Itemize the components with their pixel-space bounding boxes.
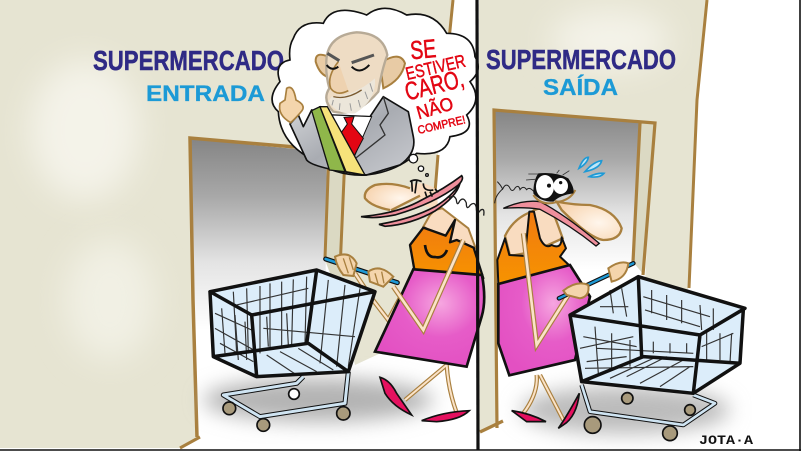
pink skirt [375, 269, 484, 367]
shopping cart: right [570, 277, 745, 441]
panel: right wall [479, 0, 707, 433]
cart basket [210, 270, 375, 377]
speech: do not buy if expensive [402, 33, 467, 137]
floor shadow: left [203, 378, 433, 422]
cart handle [559, 263, 633, 298]
wide eyes [526, 170, 575, 203]
speech: do not buy if expensive: SE [409, 33, 437, 65]
character: woman entering [326, 208, 484, 422]
nose [365, 184, 420, 210]
eyebrows [327, 53, 374, 63]
orange top [497, 212, 570, 284]
panel: right doorway [480, 110, 730, 434]
head: woman entering [361, 176, 484, 226]
jacket [290, 97, 414, 175]
face [326, 32, 387, 113]
character: woman leaving [495, 157, 633, 428]
pink skirt [498, 265, 590, 375]
eye lashes [410, 180, 438, 197]
nose [330, 62, 348, 93]
hands [563, 262, 628, 298]
thought dots [409, 154, 428, 176]
wheels [223, 389, 350, 431]
mouth [333, 90, 362, 97]
cart frame [223, 372, 348, 417]
speech: do not buy if expensive: ESTIVER [404, 51, 467, 84]
orange top [410, 220, 483, 278]
shirt [332, 115, 372, 155]
centre divider [477, 0, 478, 450]
curly hair [495, 182, 534, 203]
beard [328, 78, 375, 114]
speech: do not buy if expensive: NÃO [414, 93, 456, 123]
nose [557, 202, 622, 240]
face [410, 183, 438, 210]
closed eyes [327, 65, 369, 70]
cart basket [570, 277, 745, 393]
thought bubble [272, 8, 478, 176]
mouth [503, 201, 599, 246]
legs and shoes [380, 365, 469, 422]
front arm [393, 240, 463, 330]
presidential sash [312, 107, 345, 172]
curly hair [449, 196, 484, 216]
neck and shoulder [423, 208, 476, 248]
cart frame [582, 385, 715, 425]
heading: right supermarket: SUPERMERCADO [486, 44, 676, 75]
cart handle [326, 259, 397, 283]
speech: do not buy if expensive: CARO, [402, 65, 467, 106]
speech: do not buy if expensive: COMPRE! [417, 114, 467, 137]
panel: left doorway [180, 138, 433, 448]
ears [316, 55, 330, 77]
shoulder and neck [505, 208, 563, 256]
panel: left wall [0, 0, 453, 448]
pointing hand [280, 87, 303, 123]
heading: exit: SAÍDA [543, 73, 618, 100]
president figure [280, 32, 414, 175]
heading: left supermarket: SUPERMERCADO [93, 45, 284, 76]
arm [523, 233, 568, 345]
hands [335, 254, 393, 287]
legs and shoes [512, 375, 579, 428]
shopping cart: left [210, 270, 375, 431]
signature: JOTA·A [699, 433, 753, 448]
back arm [355, 273, 402, 320]
floor shadow: right [520, 386, 730, 434]
red tie [338, 117, 363, 157]
mouth [361, 176, 462, 226]
wheels [584, 393, 695, 441]
sweat drops [579, 157, 604, 177]
heading: entrance: ENTRADA [146, 81, 265, 106]
